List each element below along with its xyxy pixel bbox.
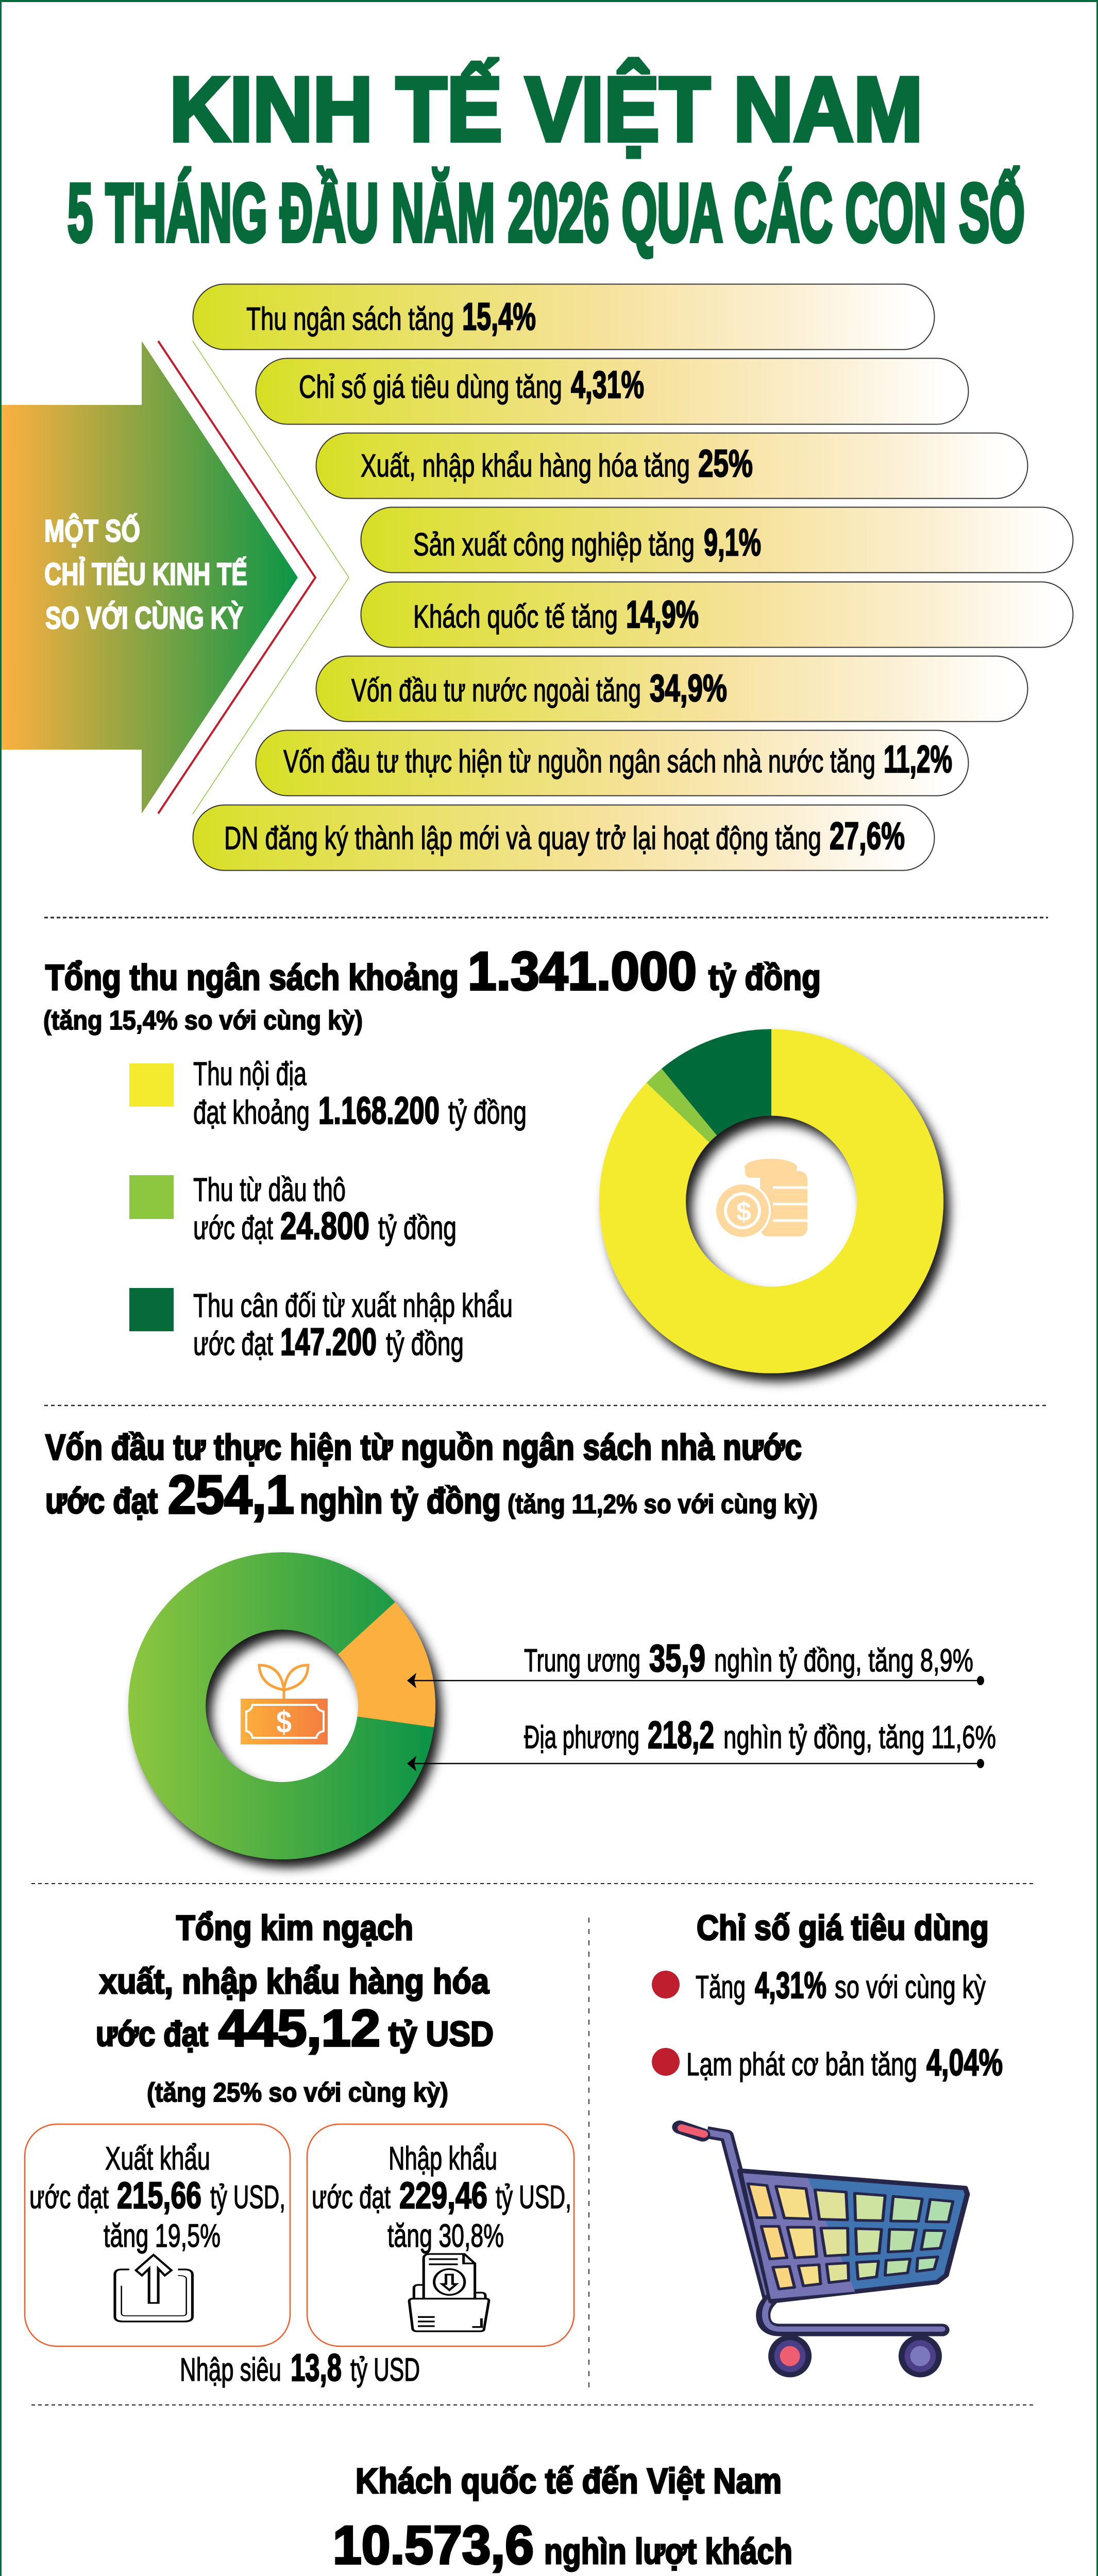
arrow panel: một số chỉ tiêu kinh tế: CHỈ TIÊU KINH TẾ bbox=[44, 557, 247, 591]
card: xuất khẩu: Xuất khẩu bbox=[105, 2141, 210, 2177]
pill: sản xuất công nghiệp bbox=[361, 507, 1073, 573]
callout: trung ương bbox=[407, 1637, 984, 1688]
arrow panel: một số chỉ tiêu kinh tế bbox=[2, 341, 349, 814]
card: xuất khẩu: tăng 19,5% bbox=[104, 2218, 221, 2254]
arrow panel: một số chỉ tiêu kinh tế: SO VỚI CÙNG KỲ bbox=[45, 601, 243, 635]
donut chart: vốn đầu tư bbox=[128, 1552, 435, 1859]
heading: vốn đầu tư từ ngân sách nhà nước: nghìn tỷ đồng bbox=[300, 1481, 501, 1521]
heading: tổng kim ngạch: tỷ USD bbox=[388, 2014, 494, 2054]
legend: thu từ dầu thô: Thu từ dầu thô bbox=[193, 1171, 346, 1208]
text: nhập siêu: tỷ USD bbox=[350, 2352, 420, 2388]
card: xuất khẩu: tỷ USD, bbox=[210, 2179, 285, 2215]
heading: chỉ số giá tiêu dùng: Chỉ số giá tiêu dùng bbox=[697, 1908, 989, 1947]
heading: tổng kim ngạch: Tổng kim ngạch bbox=[176, 1908, 413, 1947]
heading: vốn đầu tư từ ngân sách nhà nước: 254,1 bbox=[168, 1465, 294, 1525]
pill: thu ngân sách bbox=[193, 284, 935, 349]
arrow panel: một số chỉ tiêu kinh tế: MỘT SỐ bbox=[44, 514, 140, 548]
legend: thu cân đối từ xuất nhập khẩu: tỷ đồng bbox=[386, 1325, 464, 1362]
icon: plant on money: $ bbox=[276, 1705, 292, 1739]
bullet: tăng so với cùng kỳ: Tăng bbox=[696, 1970, 746, 2005]
icon: export arrow bbox=[115, 2255, 192, 2321]
legend: thu từ dầu thô: 24.800 bbox=[280, 1205, 369, 1247]
callout: trung ương: Trung ương bbox=[524, 1643, 640, 1679]
callout: trung ương: 35,9 bbox=[649, 1637, 705, 1680]
heading: tổng kim ngạch: (tăng 25% so với cùng kỳ) bbox=[147, 2078, 448, 2108]
legend: thu từ dầu thô bbox=[129, 1171, 457, 1247]
pill: doanh nghiệp đăng ký: DN đăng ký thành lập mới và quay trở lại hoạt động tăng bbox=[224, 821, 821, 856]
heading: khách quốc tế bbox=[333, 2461, 792, 2576]
heading: tổng kim ngạch: ước đạt bbox=[96, 2014, 208, 2054]
legend: thu từ dầu thô: tỷ đồng bbox=[378, 1209, 457, 1246]
heading: khách quốc tế: 10.573,6 bbox=[333, 2515, 534, 2575]
text: nhập siêu: Nhập siêu bbox=[180, 2352, 281, 2388]
heading: vốn đầu tư từ ngân sách nhà nước: (tăng 11,2% so với cùng kỳ) bbox=[508, 1489, 818, 1519]
callout: địa phương: Địa phương bbox=[524, 1720, 639, 1755]
heading: tổng kim ngạch: 445,12 bbox=[218, 1999, 380, 2057]
pill: sản xuất công nghiệp: 9,1% bbox=[704, 521, 761, 564]
pill: thu ngân sách: 15,4% bbox=[462, 295, 536, 338]
card: nhập khẩu bbox=[307, 2124, 574, 2346]
title: KINH TẾ VIỆT NAM bbox=[170, 58, 923, 160]
pill: vốn đầu tư nước ngoài bbox=[316, 656, 1027, 721]
heading: tổng thu ngân sách bbox=[43, 941, 821, 1036]
pill: vốn đầu tư từ ngân sách nhà nước: 11,2% bbox=[884, 738, 952, 781]
icon: document in folder bbox=[409, 2254, 489, 2331]
legend: thu nội địa: Thu nội địa bbox=[193, 1055, 307, 1092]
callout: địa phương: 218,2 bbox=[648, 1714, 714, 1756]
pill: thu ngân sách: Thu ngân sách tăng bbox=[246, 301, 454, 337]
heading: tổng kim ngạch bbox=[96, 1908, 494, 2108]
callout: địa phương: nghìn tỷ đồng, tăng 11,6% bbox=[723, 1720, 996, 1755]
legend: thu nội địa: tỷ đồng bbox=[448, 1094, 527, 1131]
pill: chỉ số giá tiêu dùng bbox=[256, 359, 969, 425]
pill: vốn đầu tư từ ngân sách nhà nước bbox=[256, 731, 969, 795]
callout: trung ương: nghìn tỷ đồng, tăng 8,9% bbox=[714, 1643, 973, 1679]
heading: tổng kim ngạch: xuất, nhập khẩu hàng hóa bbox=[99, 1962, 489, 2001]
bullet: tăng so với cùng kỳ bbox=[652, 1965, 986, 2006]
card: nhập khẩu: Nhập khẩu bbox=[388, 2141, 497, 2177]
title bbox=[67, 58, 1025, 259]
pill: vốn đầu tư nước ngoài: Vốn đầu tư nước ngoài tăng bbox=[351, 673, 641, 708]
heading: vốn đầu tư từ ngân sách nhà nước: Vốn đầu tư thực hiện từ nguồn ngân sách nhà nước bbox=[45, 1427, 802, 1467]
bullet: tăng so với cùng kỳ: so với cùng kỳ bbox=[835, 1970, 986, 2005]
legend: thu từ dầu thô: ước đạt bbox=[193, 1209, 273, 1246]
card: xuất khẩu: 215,66 bbox=[117, 2175, 201, 2216]
card: xuất khẩu bbox=[25, 2124, 290, 2346]
pill: doanh nghiệp đăng ký: 27,6% bbox=[830, 815, 905, 857]
text: nhập siêu bbox=[180, 2346, 420, 2389]
heading: khách quốc tế: Khách quốc tế đến Việt Nam bbox=[356, 2461, 782, 2501]
text: nhập siêu: 13,8 bbox=[291, 2346, 342, 2389]
icon: shopping cart bbox=[680, 2127, 967, 2377]
callout: địa phương bbox=[407, 1714, 996, 1771]
legend: thu cân đối từ xuất nhập khẩu: 147.200 bbox=[280, 1320, 377, 1363]
pill: xuất nhập khẩu: 25% bbox=[698, 442, 753, 485]
icon: coins: $ bbox=[736, 1197, 751, 1227]
card: nhập khẩu: 229,46 bbox=[399, 2175, 487, 2216]
pill: xuất nhập khẩu bbox=[316, 433, 1027, 499]
bullet: lạm phát cơ bản: 4,04% bbox=[926, 2042, 1003, 2083]
pill: doanh nghiệp đăng ký bbox=[193, 805, 935, 871]
card: nhập khẩu: tăng 30,8% bbox=[387, 2218, 504, 2254]
pill: vốn đầu tư từ ngân sách nhà nước: Vốn đầu tư thực hiện từ nguồn ngân sách nhà nước tăng bbox=[283, 744, 875, 779]
pill: sản xuất công nghiệp: Sản xuất công nghiệp tăng bbox=[413, 527, 695, 563]
legend: thu nội địa: 1.168.200 bbox=[318, 1089, 440, 1132]
icon: coins bbox=[715, 1159, 807, 1238]
heading: tổng thu ngân sách: (tăng 15,4% so với cùng kỳ) bbox=[43, 1006, 363, 1036]
card: nhập khẩu: tỷ USD, bbox=[496, 2179, 571, 2215]
legend: thu nội địa: đạt khoảng bbox=[193, 1094, 310, 1131]
heading: khách quốc tế: nghìn lượt khách bbox=[544, 2531, 792, 2571]
legend: thu cân đối từ xuất nhập khẩu bbox=[129, 1287, 513, 1363]
pill: xuất nhập khẩu: Xuất, nhập khẩu hàng hóa tăng bbox=[361, 448, 690, 484]
pill: khách quốc tế bbox=[361, 582, 1073, 647]
heading: vốn đầu tư từ ngân sách nhà nước: ước đạt bbox=[45, 1481, 158, 1521]
heading: tổng thu ngân sách: 1.341.000 bbox=[468, 941, 697, 1002]
pill: khách quốc tế: Khách quốc tế tăng bbox=[413, 599, 618, 635]
card: nhập khẩu: ước đạt bbox=[312, 2179, 391, 2215]
card: xuất khẩu: ước đạt bbox=[29, 2179, 109, 2215]
pill: chỉ số giá tiêu dùng: Chỉ số giá tiêu dùng tăng bbox=[299, 369, 562, 405]
heading: tổng thu ngân sách: tỷ đồng bbox=[708, 957, 821, 997]
donut chart: thu ngân sách bbox=[599, 1029, 943, 1374]
legend: thu cân đối từ xuất nhập khẩu: Thu cân đối từ xuất nhập khẩu bbox=[193, 1287, 513, 1324]
bullet: lạm phát cơ bản: Lạm phát cơ bản tăng bbox=[686, 2047, 917, 2082]
legend: thu cân đối từ xuất nhập khẩu: ước đạt bbox=[193, 1325, 273, 1362]
heading: tổng thu ngân sách: Tổng thu ngân sách khoảng bbox=[45, 957, 459, 997]
heading: vốn đầu tư từ ngân sách nhà nước bbox=[45, 1427, 818, 1525]
pill: khách quốc tế: 14,9% bbox=[626, 593, 699, 636]
pill: chỉ số giá tiêu dùng: 4,31% bbox=[571, 363, 644, 406]
icon: plant on money bbox=[241, 1665, 328, 1744]
pill: vốn đầu tư nước ngoài: 34,9% bbox=[650, 667, 727, 709]
legend: thu nội địa bbox=[129, 1055, 527, 1132]
bullet: tăng so với cùng kỳ: 4,31% bbox=[755, 1965, 826, 2006]
